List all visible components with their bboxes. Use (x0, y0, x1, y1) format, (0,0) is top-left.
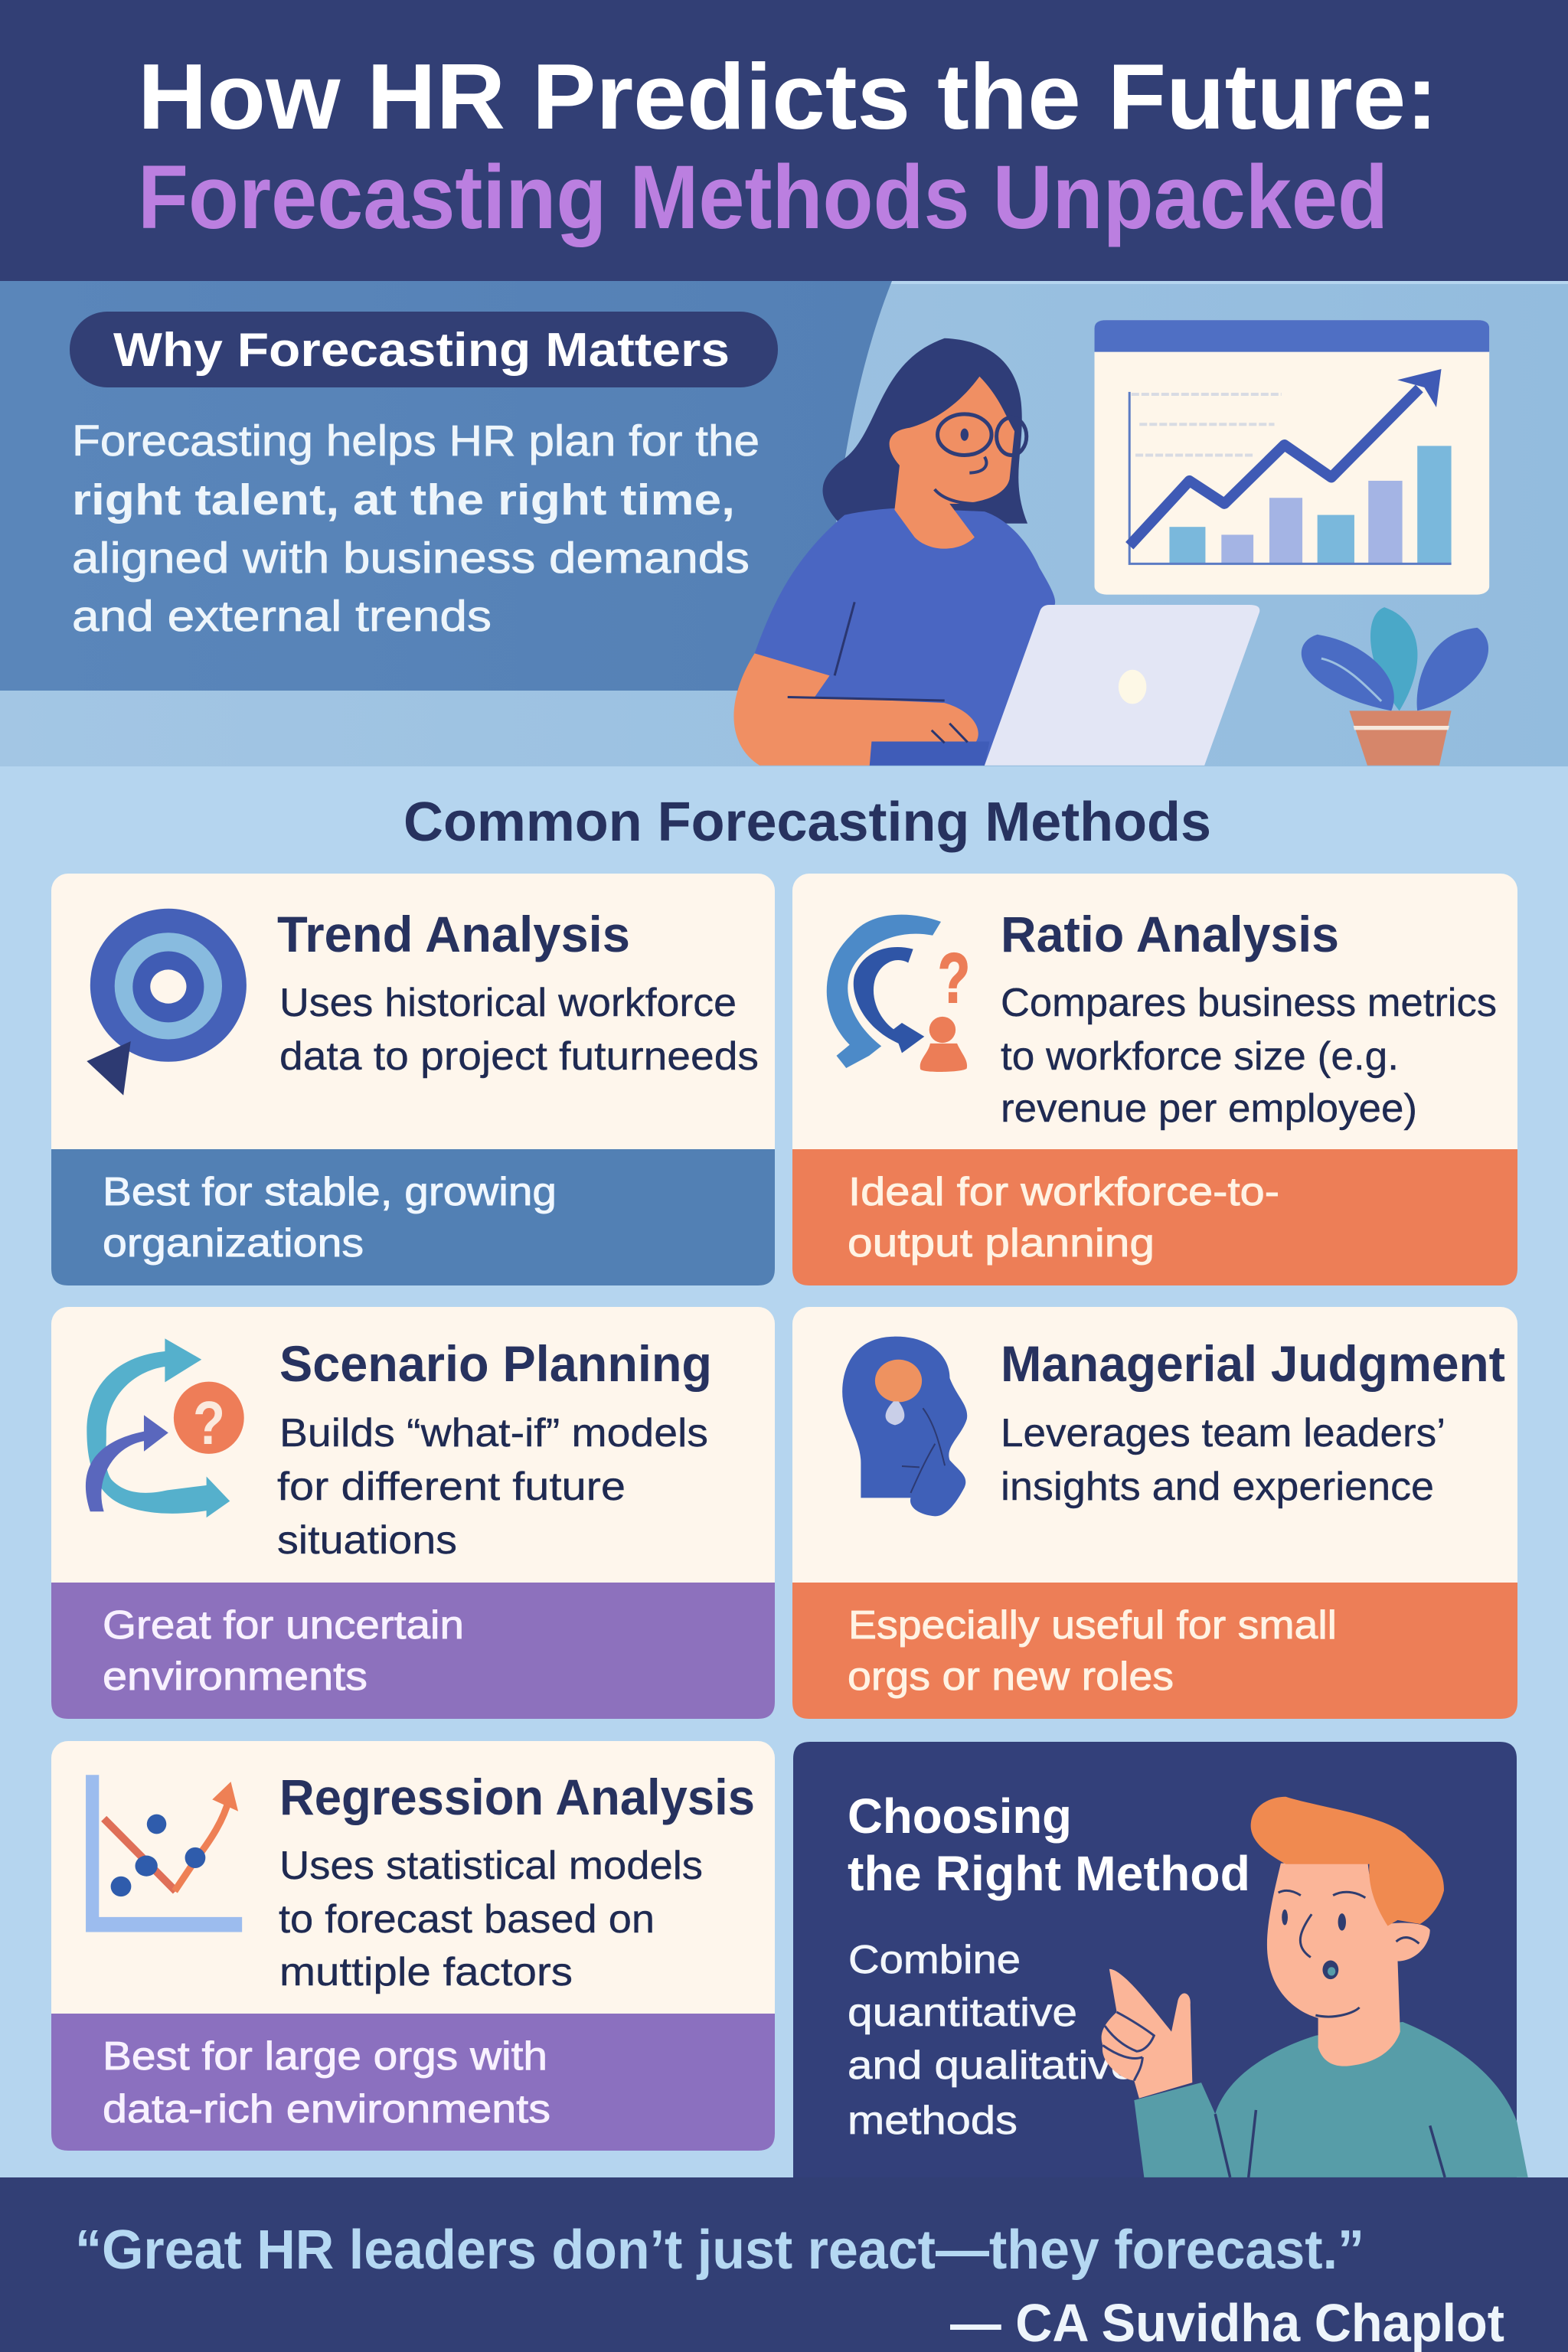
best-for band text: organizations (103, 1221, 364, 1266)
chart card (1095, 320, 1489, 595)
best-for band text: data-rich environments (103, 2087, 550, 2132)
title line 2: Forecasting Methods Unpacked (138, 147, 1388, 248)
quote text: “Great HR leaders don’t just react—they forecast.” (75, 2220, 1364, 2281)
best-for band text: Best for stable, growing (103, 1170, 557, 1214)
best-for band text (848, 1170, 1279, 1266)
attribution: — CA Suvidha Chaplot (950, 2293, 1504, 2352)
heading: the Right Method (848, 1846, 1250, 1901)
best-for band text: Great for uncertain (103, 1603, 464, 1648)
section heading: Common Forecasting Methods (403, 792, 1211, 853)
card text: Compares business metrics (1001, 981, 1497, 1025)
card text (279, 1769, 755, 1994)
card text: Managerial Judgment (1001, 1335, 1505, 1392)
panel: choosing the right method (793, 1742, 1528, 2177)
best-for band text: orgs or new roles (848, 1655, 1174, 1699)
heading pill: Why Forecasting Matters (113, 324, 730, 377)
body text: Combine (848, 1938, 1021, 1982)
card text: revenue per employee) (1001, 1086, 1417, 1131)
icon: head silhouette (842, 1337, 967, 1516)
card text: to workforce size (e.g. (1001, 1034, 1399, 1079)
title line 1: How HR Predicts the Future: (138, 44, 1438, 149)
card text: to forecast based on (279, 1897, 655, 1942)
panel: regression analysis (51, 1741, 775, 2151)
card text: insights and experience (1001, 1465, 1434, 1509)
intro text: Forecasting helps HR plan for the (72, 416, 760, 466)
icon: ratio arrows and person: ? (938, 939, 970, 1018)
best-for band text: environments (103, 1655, 368, 1699)
illustration: woman at laptop (733, 338, 1259, 766)
intro text (72, 416, 760, 641)
heading (848, 1788, 1250, 1901)
card text: Trend Analysis (277, 906, 630, 962)
plant (1302, 607, 1488, 766)
panel: ratio analysis (792, 874, 1517, 1285)
card text: Ratio Analysis (1001, 906, 1339, 962)
panel: trend analysis (51, 874, 775, 1285)
card text: Leverages team leaders’ (1001, 1411, 1446, 1455)
best-for band text: Best for large orgs with (103, 2034, 547, 2079)
best-for band text: output planning (848, 1221, 1155, 1266)
card text (277, 1335, 712, 1563)
card text: Builds “what-if” models (279, 1411, 708, 1455)
best-for band text (103, 1170, 557, 1266)
card text: Scenario Planning (279, 1335, 712, 1392)
heading: Choosing (848, 1788, 1072, 1844)
header banner (0, 0, 1568, 281)
card text (1001, 906, 1497, 1131)
card text: Regression Analysis (279, 1769, 755, 1825)
illustration: man pointing (1102, 1797, 1528, 2177)
body text: quantitative (848, 1991, 1077, 2035)
body text: methods (848, 2099, 1018, 2143)
best-for band text (103, 1603, 464, 1699)
card text: for different future (277, 1465, 626, 1509)
best-for band text: Especially useful for small (848, 1603, 1337, 1648)
icon: regression chart (86, 1775, 242, 1932)
icon: scenario arrows (86, 1338, 244, 1517)
card text: situations (277, 1518, 457, 1563)
intro text: and external trends (72, 592, 492, 641)
panel: why forecasting matters (0, 281, 1568, 766)
intro text: aligned with business demands (72, 534, 750, 583)
body text (848, 1938, 1135, 2143)
best-for band text (848, 1603, 1337, 1699)
icon: target (87, 909, 247, 1096)
icon: scenario arrows: ? (193, 1389, 225, 1457)
heading pill (70, 312, 778, 387)
card text: muttiple factors (279, 1950, 573, 1994)
body text: and qualitative (848, 2043, 1135, 2088)
footer: quote (0, 2177, 1568, 2352)
icon: ratio arrows and person (827, 915, 970, 1072)
intro text: right talent, at the right time, (72, 475, 735, 524)
card text: data to project futurneeds (279, 1034, 759, 1079)
card text (1001, 1335, 1505, 1509)
panel: scenario planning (51, 1307, 775, 1719)
best-for band text: Ideal for workforce-to- (848, 1170, 1279, 1214)
card text (277, 906, 759, 1079)
card text: Uses statistical models (279, 1844, 703, 1888)
panel: managerial judgment (792, 1307, 1517, 1719)
best-for band text (103, 2034, 550, 2132)
card text: Uses historical workforce (279, 981, 737, 1025)
